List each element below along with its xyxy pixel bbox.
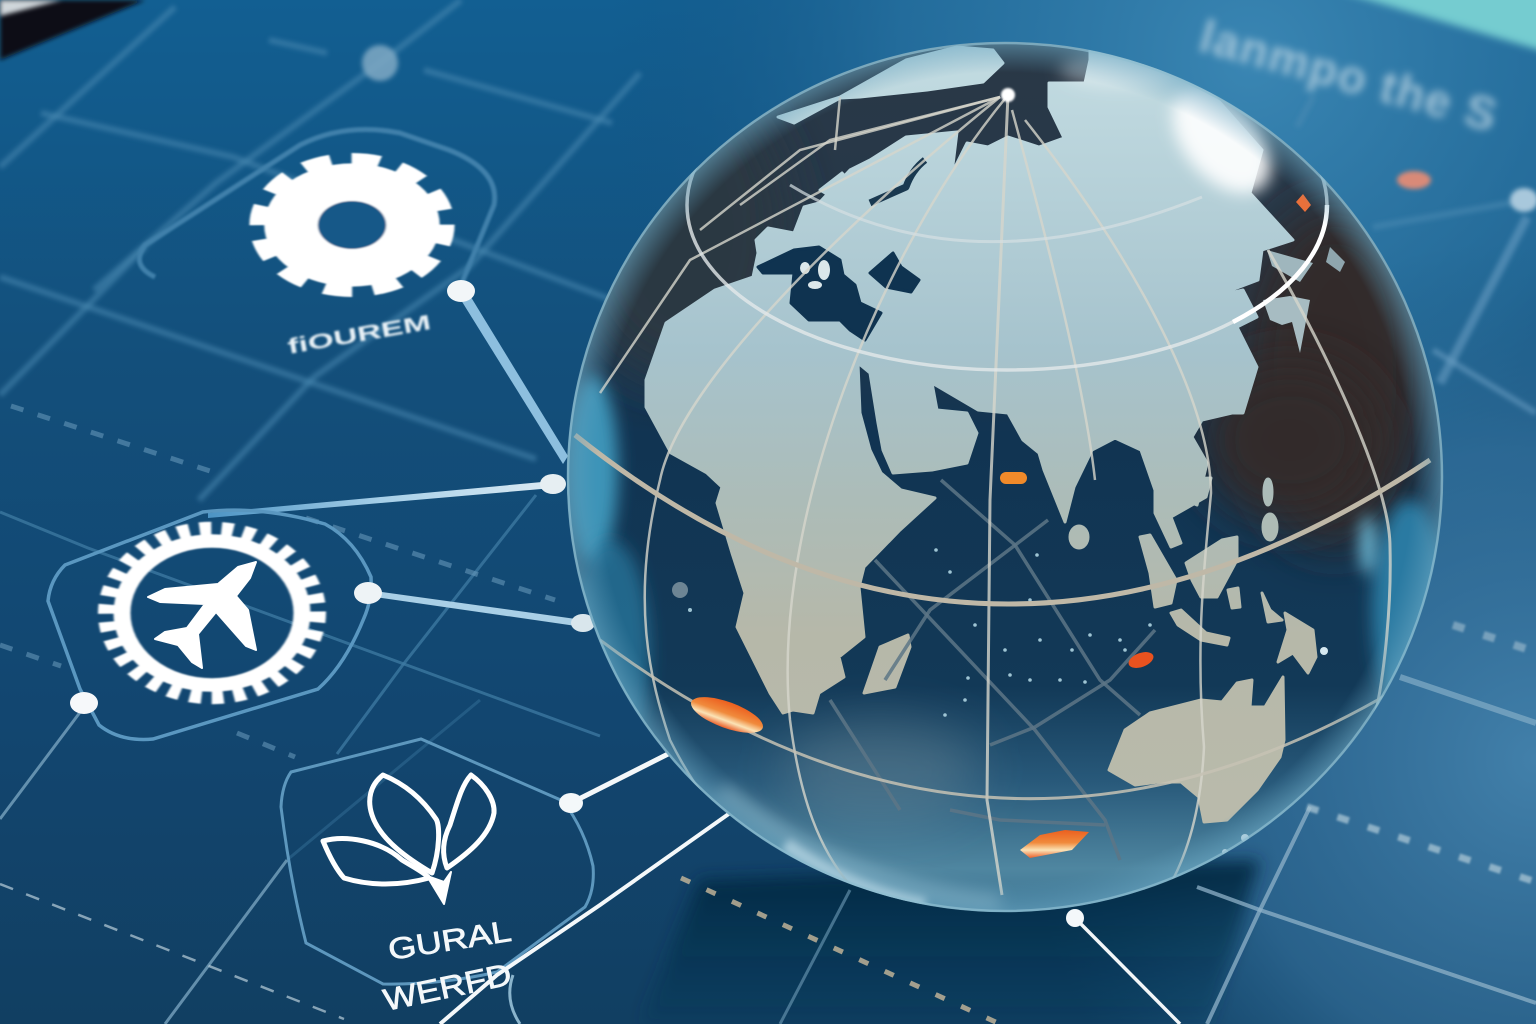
panel: leaf outline — [281, 739, 593, 1018]
label: fiOUREM: fiOUREM — [286, 311, 433, 359]
sea: Caspian — [870, 253, 919, 292]
globe dark side and glass glows — [566, 80, 1448, 905]
islands in Mediterranean — [800, 260, 830, 289]
seas on land — [758, 160, 925, 340]
ocean stars — [672, 548, 1249, 855]
marker: South Atlantic — [691, 697, 763, 733]
node: plane panel lower left — [70, 692, 98, 714]
continents — [646, 47, 1345, 822]
land: Southeast Asia — [1155, 478, 1211, 547]
sea: Baltic — [870, 160, 925, 203]
glass globe — [566, 40, 1448, 912]
specular highlight — [1060, 52, 1291, 212]
panel: gear outline — [139, 129, 495, 359]
label: GURAL: GURAL — [386, 915, 514, 967]
small outline arc bottom — [510, 975, 520, 1024]
land: Sri Lanka — [1070, 526, 1088, 548]
blurred heading top right: lanmpo the S — [1194, 10, 1504, 142]
blurred orange marker top right — [1397, 171, 1431, 189]
meridians — [600, 95, 1390, 895]
connector: panel to globe node — [208, 474, 566, 518]
land: Arctic fringe — [778, 47, 1003, 123]
land: Eurasia and Africa — [646, 50, 1293, 713]
marker: Arabian Sea — [1000, 472, 1027, 484]
connector: leaf panel to globe — [559, 752, 672, 813]
connector: plane panel to globe — [354, 582, 595, 632]
icon: gear — [257, 159, 447, 291]
land: Australia — [1109, 677, 1284, 822]
blurred node right — [1510, 188, 1536, 212]
connector: bottom node — [1066, 909, 1180, 1024]
glass rim glow — [567, 42, 1443, 912]
marker: Southern Ocean — [1020, 830, 1089, 858]
panel: plane gear outline — [48, 510, 371, 739]
sea: Mediterranean — [758, 247, 881, 340]
north pole node — [1001, 88, 1015, 102]
globe rim — [568, 43, 1442, 911]
marker: Indian Ocean east — [1128, 652, 1154, 668]
connector: gear to globe — [447, 280, 568, 464]
dim network lines inside globe — [830, 480, 1155, 860]
icon: plane — [148, 562, 256, 668]
marker: Pacific north — [1296, 194, 1311, 212]
blurred node top — [362, 45, 398, 81]
connector: long white line — [440, 813, 730, 1024]
icon: gear ring — [109, 531, 315, 695]
icon: leaves — [323, 775, 494, 904]
latitude lines — [574, 167, 1432, 800]
marker: hotspots — [687, 194, 1311, 858]
land: Madagascar — [864, 635, 910, 693]
label: WERFD: WERFD — [380, 957, 515, 1018]
